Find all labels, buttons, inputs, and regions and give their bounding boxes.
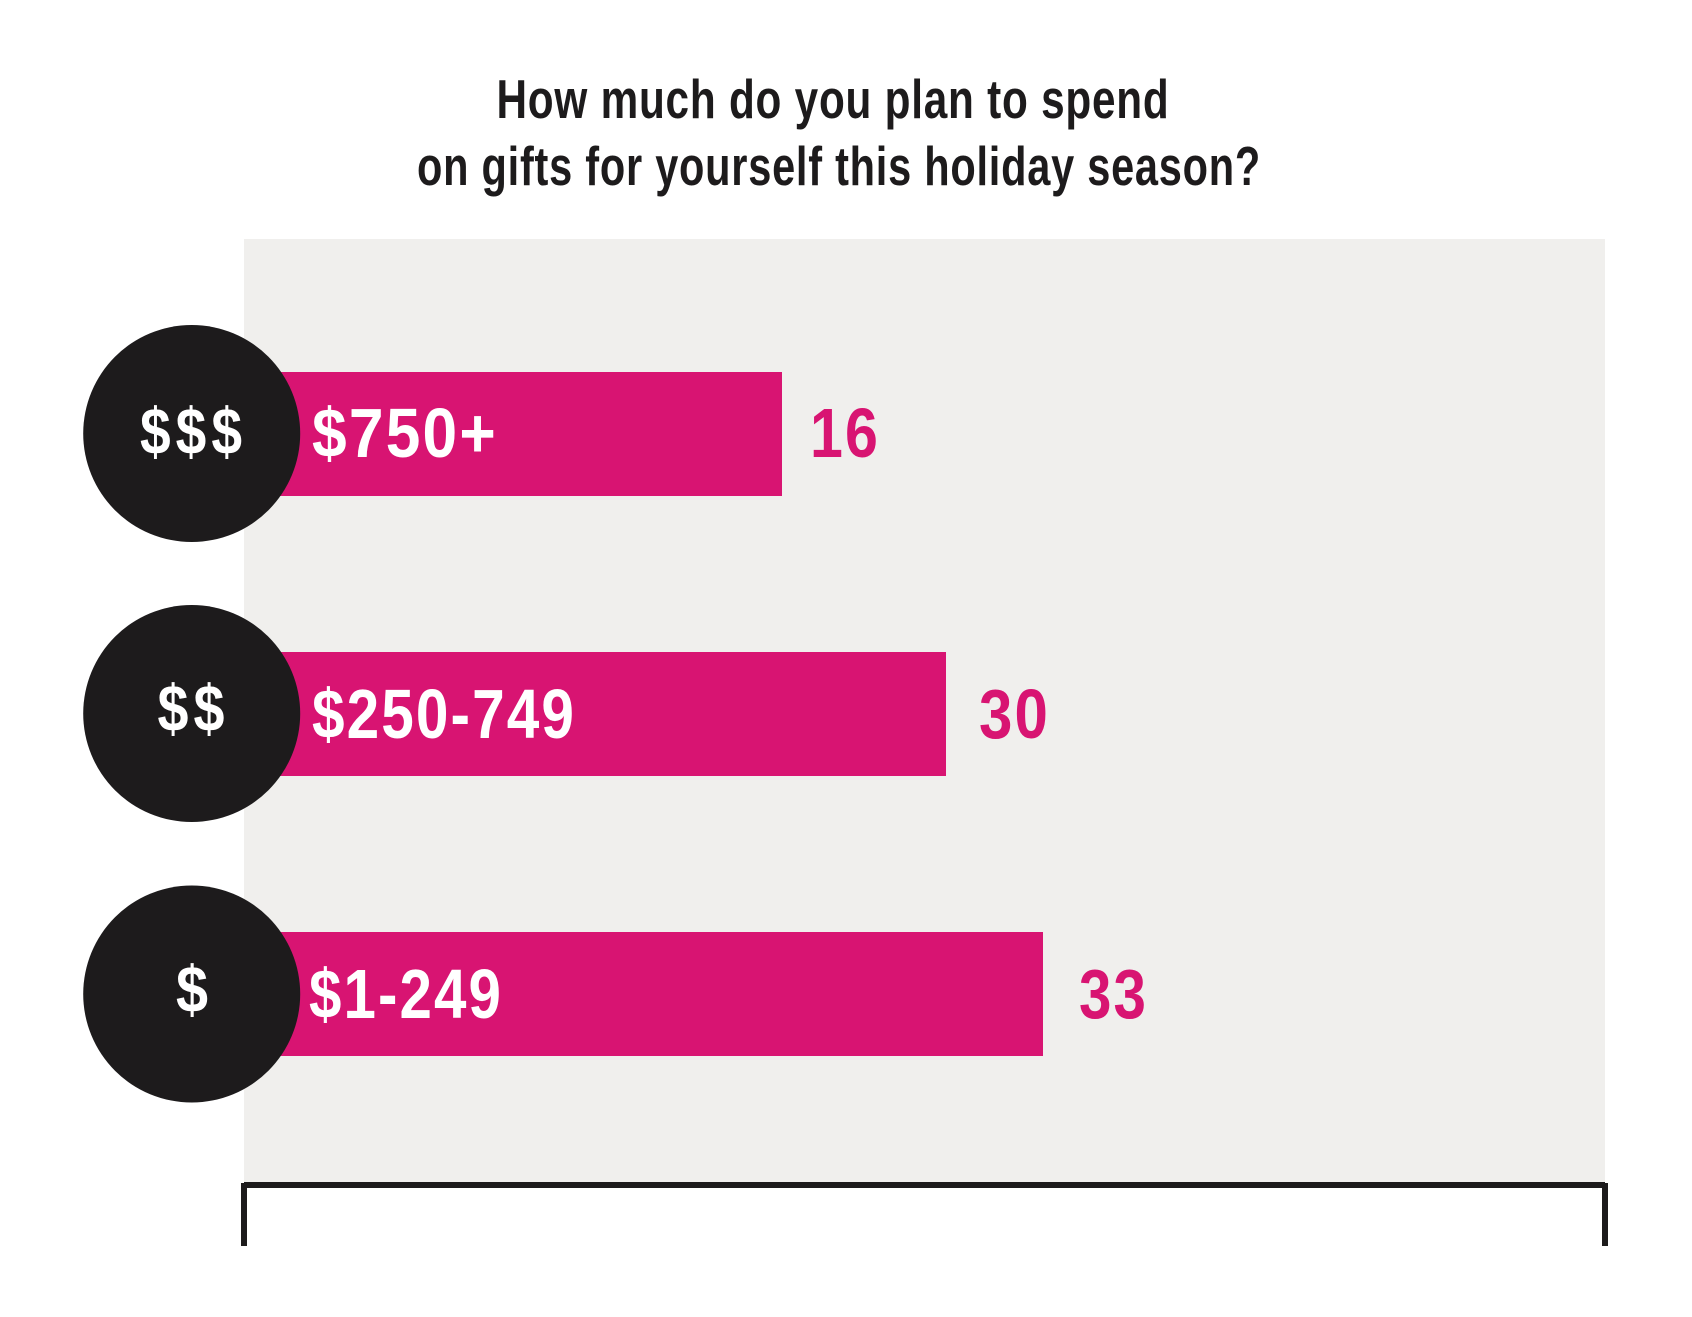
- value: 33: 33: [1079, 955, 1148, 1033]
- bar label: $250-749: $250-749: [312, 675, 576, 753]
- icon: circle $: $: [176, 952, 208, 1026]
- bar label: $750+: $750+: [312, 394, 498, 472]
- icon: circle $$$: [83, 325, 300, 542]
- icon: circle $$$: $$$: [140, 394, 247, 468]
- row: $1-249: [83, 886, 1148, 1102]
- title: on gifts for yourself this holiday season?: [417, 135, 1261, 197]
- bracket axis: [241, 1182, 1608, 1246]
- icon: circle $$: $$: [158, 671, 230, 745]
- row: $750+: [83, 325, 880, 542]
- title: How much do you plan to spend: [496, 68, 1170, 130]
- bar label: $1-249: $1-249: [309, 955, 503, 1033]
- bar: $750+: [250, 372, 782, 496]
- value: 30: 30: [979, 675, 1050, 753]
- icon: circle $: [83, 886, 300, 1102]
- bar: $1-249: [250, 932, 1043, 1056]
- row: $250-749: [83, 605, 1050, 822]
- panel: chart background: [244, 239, 1605, 1182]
- icon: circle $$: [83, 605, 300, 822]
- value: 16: 16: [810, 394, 880, 472]
- title: [417, 68, 1261, 197]
- bar: $250-749: [250, 652, 946, 776]
